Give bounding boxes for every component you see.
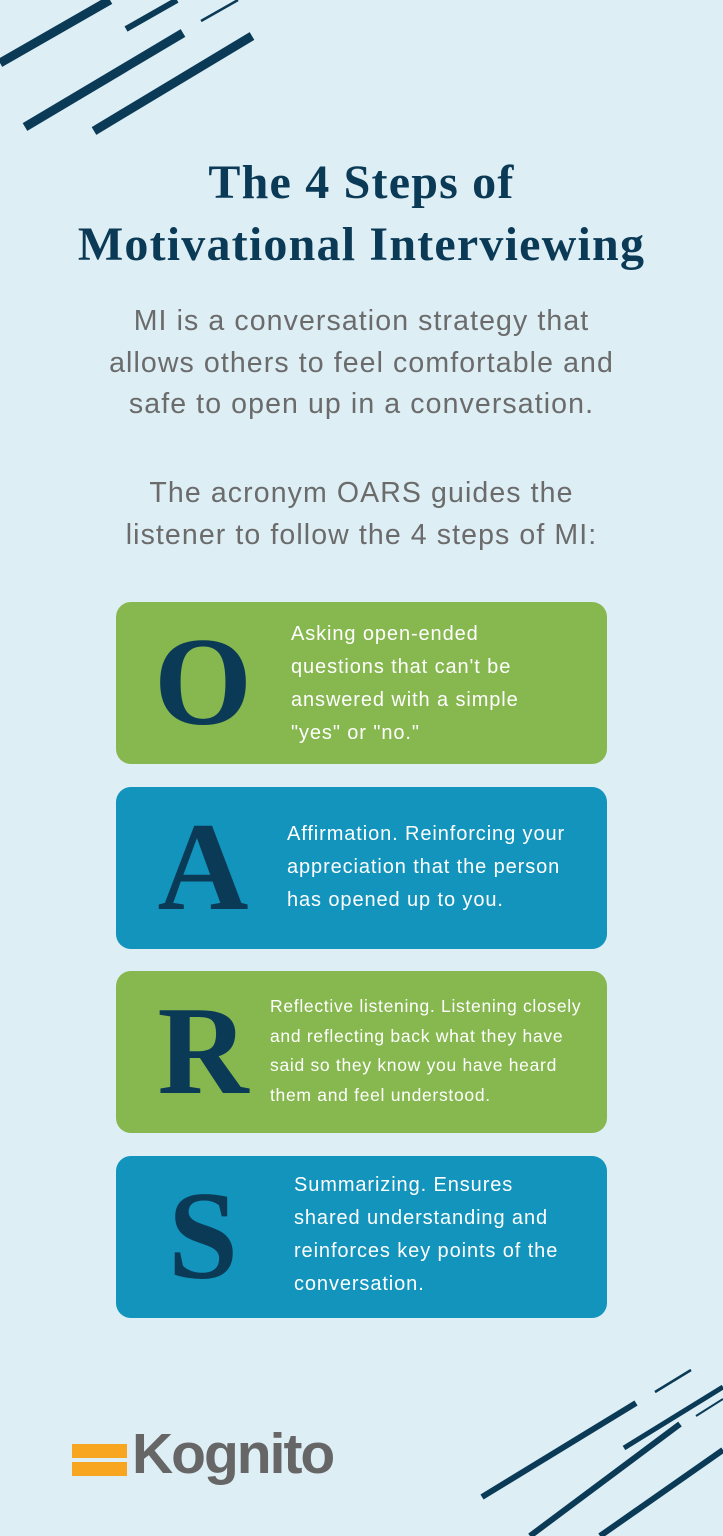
intro text: safe to open up in a conversation. (129, 388, 594, 420)
text S: Summarizing. Ensures (294, 1174, 513, 1196)
intro text: allows others to feel comfortable and (109, 346, 614, 378)
title (78, 156, 645, 271)
text O: answered with a simple (291, 689, 519, 711)
text S: reinforces key points of the (294, 1240, 558, 1262)
text A (287, 823, 565, 911)
text S: shared understanding and (294, 1207, 548, 1229)
letter A: A (158, 798, 248, 937)
text A: Affirmation. Reinforcing your (287, 823, 565, 845)
logo text: Kognito (132, 1422, 333, 1486)
acronym text (126, 477, 597, 550)
text O: "yes" or "no." (291, 722, 420, 744)
text S (294, 1174, 558, 1295)
acronym text: The acronym OARS guides the (149, 477, 574, 509)
title: Motivational Interviewing (78, 218, 645, 271)
card: A (116, 787, 607, 949)
letter R: R (158, 982, 248, 1121)
text R: and reflecting back what they have (270, 1026, 563, 1046)
intro text: MI is a conversation strategy that (134, 305, 589, 337)
text R (270, 996, 581, 1104)
text S: conversation. (294, 1273, 425, 1295)
text O: Asking open-ended (291, 623, 479, 645)
text O (291, 623, 519, 744)
text A: appreciation that the person (287, 856, 560, 878)
card: O (116, 602, 607, 764)
acronym text: listener to follow the 4 steps of MI: (126, 518, 597, 550)
text R: them and feel understood. (270, 1084, 491, 1104)
decorative lines bottom (480, 1368, 723, 1536)
letter O: O (154, 613, 252, 752)
text R: said so they know you have heard (270, 1055, 557, 1075)
logo: Kognito (72, 1422, 333, 1486)
letter S: S (168, 1167, 238, 1306)
text A: has opened up to you. (287, 889, 504, 911)
intro text (109, 305, 614, 420)
card: R (116, 971, 607, 1133)
icon: orange bars (72, 1444, 127, 1458)
decorative lines top (0, 0, 254, 135)
text O: questions that can't be (291, 656, 511, 678)
title: The 4 Steps of (208, 156, 515, 209)
text R: Reflective listening. Listening closely (270, 996, 581, 1016)
card: S (116, 1156, 607, 1318)
